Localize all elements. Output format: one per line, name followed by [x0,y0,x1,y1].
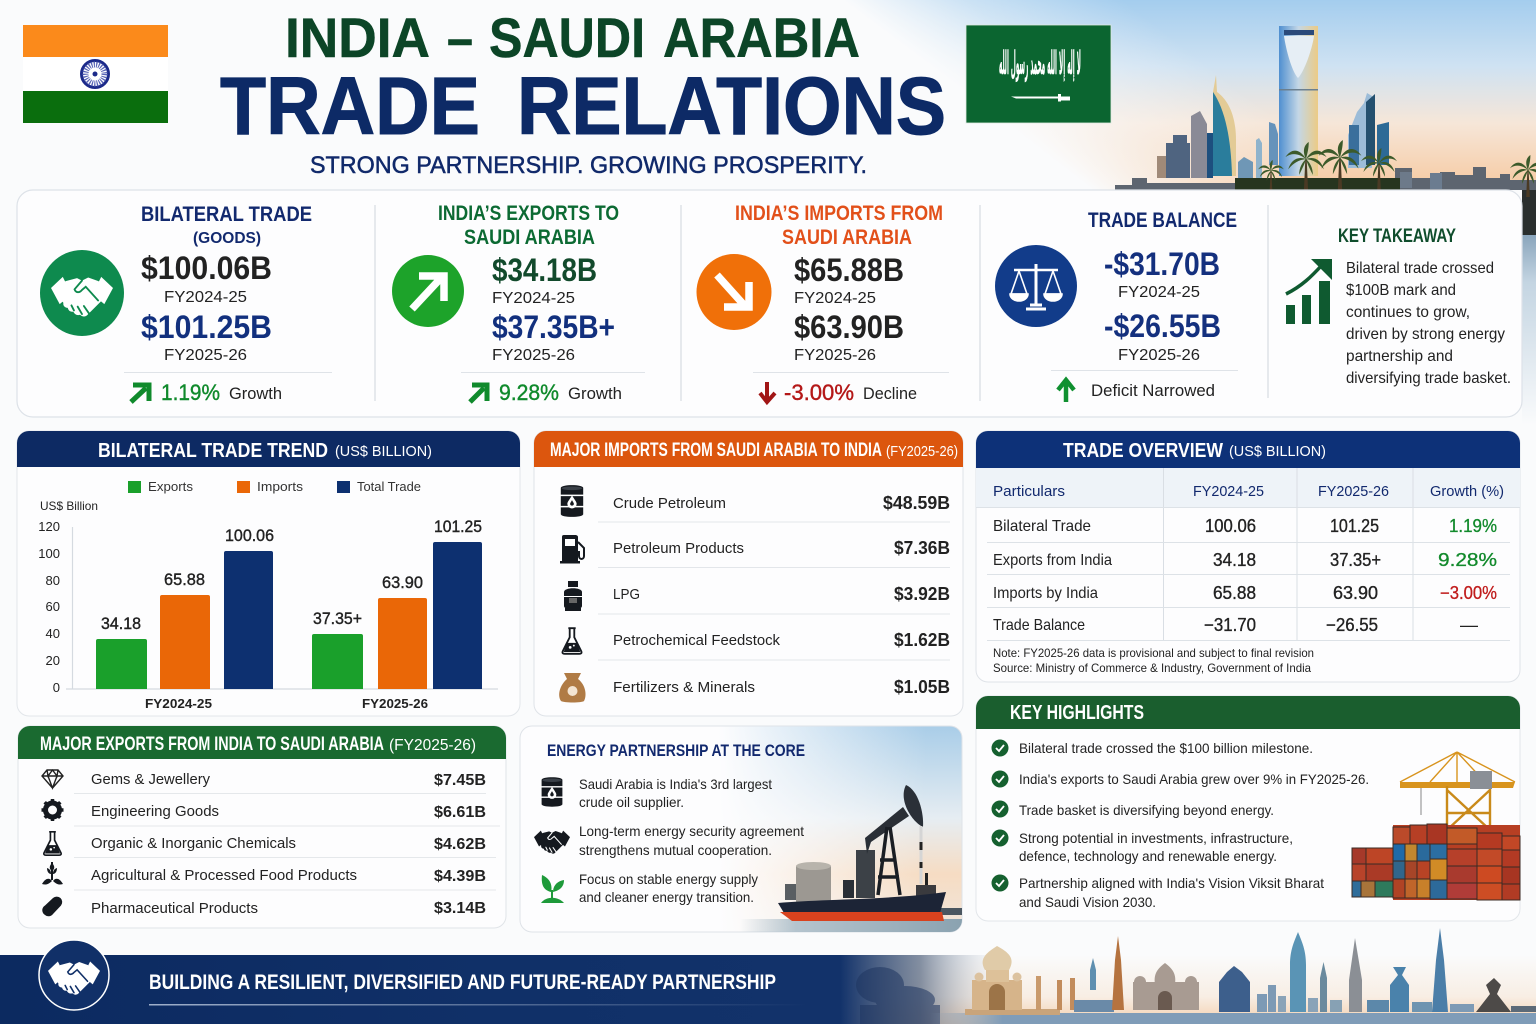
bar chart: 101.25 [434,517,482,536]
panel: trade overview table: Source: Ministry of Commerce & Industry, Government of India [993,661,1311,675]
panel: trade overview table: TRADE OVERVIEW [1063,440,1223,462]
panel: bilateral trade trend [17,431,520,716]
bar chart [38,499,498,711]
title line one: INDIA [285,6,430,69]
panel: major exports: Agricultural & Processed Food Products [91,867,357,884]
bar chart: FY2024-25 [145,696,212,711]
panel: trade overview table: FY2025-26 [1318,483,1389,500]
panel: trade overview table: −31.70 [1204,615,1256,635]
KPI: exports: $34.18B [492,252,597,288]
panel: trade overview table: Bilateral Trade [993,518,1091,535]
KPI: imports: $65.88B [794,252,904,288]
KPI: bilateral trade: 1.19% [161,380,220,405]
panel: trade overview table: Exports from India [993,552,1112,569]
kingdom tower [1279,26,1318,176]
KPI: trade balance: Deficit Narrowed [1091,381,1215,400]
icon: fertilizer sack [559,673,586,702]
icon: plant [42,862,63,885]
KPI: trade balance: FY2024-25 [1118,284,1200,301]
icon: gear [42,799,64,821]
KPI: bilateral trade: (GOODS) [193,230,261,247]
panel: major exports: $4.39B [434,868,486,885]
panel: major imports: Petrochemical Feedstock [613,632,780,649]
KPI: imports: FY2024-25 [794,290,876,307]
panel: major exports: $4.62B [434,836,486,853]
panel: major imports: $3.92B [894,584,950,604]
panel: trade overview table: 63.90 [1333,583,1378,603]
KPI: imports: FY2025-26 [794,347,876,364]
panel: trade overview table: 1.19% [1449,516,1497,536]
panel: trade overview table: Imports by India [993,585,1098,602]
panel: bilateral trade trend: (US$ BILLION) [335,443,432,460]
KPI: exports: SAUDI ARABIA [464,226,595,249]
KPI: exports: FY2024-25 [492,290,575,307]
highlight list: Partnership aligned with India's Vision Viksit Bharat [1019,875,1324,891]
panel: major exports: Engineering Goods [91,803,219,820]
highlight list: Trade basket is diversifying beyond energy. [1019,802,1274,818]
panel: energy partnership: ENERGY PARTNERSHIP AT THE CORE [547,741,805,760]
KPI: key takeaway: partnership and [1346,348,1453,365]
footer band [0,955,1000,1024]
panel: energy partnership: strengthens mutual cooperation. [579,842,772,858]
panel: KPI summary card [17,190,1522,417]
KPI: trade balance: -$26.55B [1104,308,1221,344]
panel: major exports [18,726,506,928]
panel: major exports: $7.45B [434,772,486,789]
bar chart: 120 [38,519,60,534]
footer handshake badge [39,940,109,1010]
chart legend: Total Trade [357,479,421,494]
chart legend: Imports [257,479,304,494]
KPI: exports: FY2025-26 [492,347,575,364]
panel: major imports: $1.62B [894,630,950,650]
panel: major imports: $1.05B [894,677,950,697]
KPI: imports: Decline [863,384,917,403]
icon: diamond [42,770,63,788]
bar chart: 40 [46,626,60,641]
title line one: – [447,6,473,69]
icon: barrel [540,777,564,807]
bar chart: 60 [46,599,60,614]
KPI: bilateral trade: BILATERAL TRADE [141,203,312,226]
KPI: bilateral trade: $100.06B [141,250,272,286]
KPI: key takeaway: driven by strong energy [1346,326,1505,343]
panel: major imports: Crude Petroleum [613,495,726,512]
icon: flask [44,832,61,855]
panel: trade overview table: (US$ BILLION) [1229,443,1326,460]
panel: trade overview table: Particulars [993,483,1065,500]
icon: sprout [541,875,564,903]
panel: trade overview table: Trade Balance [993,617,1085,634]
bar chart: FY2025-26 [362,696,428,711]
panel: major exports: $6.61B [434,804,486,821]
panel: trade overview table: — [1460,615,1478,635]
panel: major imports: Petroleum Products [613,540,744,557]
KPI: trade balance [995,209,1238,402]
KPI: key takeaway: Bilateral trade crossed [1346,260,1494,277]
title line one: SAUDI [489,6,645,69]
bar chart: 80 [46,573,60,588]
KPI: trade balance: FY2025-26 [1118,347,1200,364]
bar chart: 0 [53,680,60,695]
panel: trade overview table [976,431,1520,682]
bar chart: 37.35+ [313,609,362,628]
panel: energy partnership: Saudi Arabia is India's 3rd largest [579,776,772,792]
KPI: imports: $63.90B [794,309,904,345]
highlight list: India's exports to Saudi Arabia grew over 9% in FY2025-26. [1019,771,1369,787]
panel: major imports: $48.59B [883,493,950,513]
highlight list [992,740,1369,910]
panel: trade overview table: 65.88 [1213,583,1256,603]
KPI: key takeaway: diversifying trade basket. [1346,370,1511,387]
KPI: key takeaway: continues to grow, [1346,304,1470,321]
tagline: STRONG PARTNERSHIP. GROWING PROSPERITY. [310,152,867,179]
panel: major imports: Fertilizers & Minerals [613,679,755,696]
icon: crane and containers [1352,752,1520,900]
bar chart: 100.06 [225,526,274,545]
text: لا إله إلا الله محمد رسول الله [999,44,1081,83]
KPI: exports: $37.35B+ [492,309,615,345]
panel: major exports: Gems & Jewellery [91,771,210,788]
panel: major exports: $3.14B [434,900,486,917]
panel: trade overview table: 9.28% [1438,550,1497,570]
KPI: exports: 9.28% [499,380,559,405]
icon: pill [42,897,62,916]
panel: key highlights [976,696,1520,921]
footer slogan: BUILDING A RESILIENT, DIVERSIFIED AND FUTURE-READY PARTNERSHIP [149,971,776,994]
India flag [23,25,168,123]
bar chart: 20 [46,653,60,668]
panel: trade overview table: −26.55 [1326,615,1378,635]
icon: handshake [534,831,570,854]
Taj Mahal [972,946,1075,1010]
panel: major exports: Pharmaceutical Products [91,900,258,917]
highlight list: and Saudi Vision 2030. [1019,894,1156,910]
panel: major exports: Organic & Inorganic Chemicals [91,835,296,852]
title line one [285,6,860,69]
panel: trade overview table: Growth (%) [1430,483,1504,500]
panel: major imports: LPG [613,586,640,603]
KPI: imports: INDIA’S IMPORTS FROM [735,202,943,225]
icon: flask [562,628,582,654]
icon: fuel pump [560,535,584,564]
Qutub Minar [1112,936,1124,1010]
panel: major exports: (FY2025-26) [389,737,476,754]
Saudi flag [966,25,1111,123]
chart legend [128,479,421,494]
panel: major imports: MAJOR IMPORTS FROM SAUDI ARABIA TO INDIA [550,440,882,461]
panel: energy partnership [520,726,962,932]
bar chart: 63.90 [382,573,423,592]
KPI: key takeaway [1286,226,1511,387]
icon: oil barrel [559,485,585,517]
footer skyline background [850,955,1536,1024]
highlight list: Strong potential in investments, infrastructure, [1019,830,1293,846]
KPI: exports: INDIA’S EXPORTS TO [438,202,619,225]
panel: major imports: $7.36B [894,538,950,558]
panel: major exports: MAJOR EXPORTS FROM INDIA TO SAUDI ARABIA [40,734,384,755]
KPI: bilateral trade: $101.25B [141,309,272,345]
title line two [220,61,946,152]
domed palace [1133,963,1199,1010]
KPI: bilateral trade: FY2025-26 [164,347,247,364]
title line two: TRADE [220,61,480,152]
panel: trade overview table: 34.18 [1213,550,1256,570]
panel: trade overview table: FY2024-25 [1193,483,1264,500]
title line one: ARABIA [663,6,860,69]
panel: bilateral trade trend: BILATERAL TRADE TREND [98,440,328,462]
panel: energy partnership: Focus on stable energy supply [579,871,758,887]
KPI: bilateral trade [40,203,332,405]
bar chart: 100 [38,546,60,561]
KPI: exports [392,202,645,405]
KPI: exports: Growth [568,384,622,403]
highlight list: defence, technology and renewable energy. [1019,848,1277,864]
panel: trade overview table: 37.35+ [1330,550,1381,570]
KPI: imports: -3.00% [784,380,854,405]
KPI: bilateral trade: Growth [229,384,282,403]
KPI: trade balance: TRADE BALANCE [1088,209,1237,232]
illustration: tanker and pumpjack [740,785,962,932]
panel: energy partnership: crude oil supplier. [579,794,684,810]
panel: trade overview table: Note: FY2025-26 data is provisional and subject to final revision [993,646,1314,660]
title line two: RELATIONS [517,61,946,152]
bar chart: 34.18 [101,614,141,633]
KPI: imports: SAUDI ARABIA [782,226,912,249]
KPI: bilateral trade: FY2024-25 [164,289,247,306]
KPI: trade balance: -$31.70B [1104,246,1220,282]
header skyline image [780,0,1536,425]
highlight list: Bilateral trade crossed the $100 billion milestone. [1019,740,1313,756]
footer trees [856,967,940,1024]
footer city skyline [930,928,1536,1024]
panel: key highlights: KEY HIGHLIGHTS [1010,702,1144,724]
panel: trade overview table: 100.06 [1205,516,1256,536]
chart legend: Exports [148,479,194,494]
panel: trade overview table: 101.25 [1330,516,1379,536]
icon: LPG cylinder [564,581,582,611]
bar chart: 65.88 [164,570,205,589]
KPI: imports [696,202,949,405]
KPI: key takeaway: KEY TAKEAWAY [1338,226,1456,247]
panel: major imports: (FY2025-26) [886,443,958,460]
bar chart: US$ Billion [40,499,98,513]
panel: energy partnership: Long-term energy security agreement [579,823,804,839]
panel: energy partnership: and cleaner energy transition. [579,889,754,905]
panel: trade overview table: −3.00% [1440,583,1497,603]
KPI: key takeaway: $100B mark and [1346,282,1456,299]
panel: major imports [534,431,963,716]
